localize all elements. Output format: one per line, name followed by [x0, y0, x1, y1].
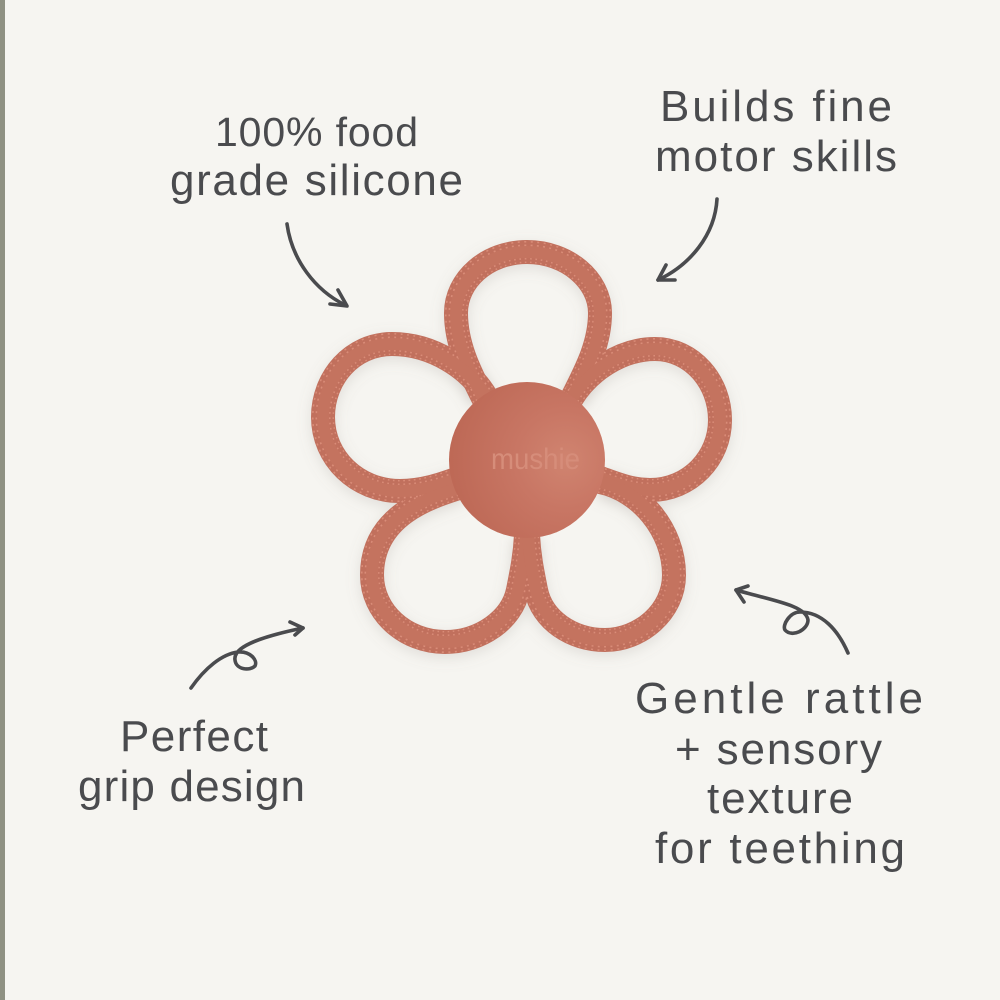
heading: 100% food grade silicone [170, 109, 463, 205]
heading: gentle rattle and sensory texture for teething: texture [707, 774, 853, 823]
arrow: to top petal [658, 199, 717, 280]
petal rings [323, 252, 720, 642]
heading: gentle rattle and sensory texture for teething [635, 674, 923, 873]
arrow: to upper left petal [287, 224, 347, 306]
heading: perfect grip design: grip design [78, 762, 305, 811]
arrow: looped, to lower right petal [736, 586, 848, 653]
heading: perfect grip design: Perfect [120, 712, 268, 761]
arrow: looped, to lower left petal [191, 622, 303, 688]
heading: 100% food grade silicone: grade silicone [170, 156, 463, 205]
heading: gentle rattle and sensory texture for teething: for teething [655, 824, 905, 873]
soft shadow [323, 256, 720, 646]
heading: perfect grip design [78, 712, 305, 811]
heading: 100% food grade silicone: 100% food [215, 109, 418, 155]
center ball with logo [449, 382, 605, 538]
heading: gentle rattle and sensory texture for teething: + sensory [675, 725, 882, 774]
heading: builds fine motor skills: motor skills [655, 132, 897, 181]
heading: builds fine motor skills [655, 82, 897, 181]
heading: gentle rattle and sensory texture for teething: Gentle rattle [635, 674, 923, 723]
left edge bar [0, 0, 5, 1000]
heading: builds fine motor skills: Builds fine [660, 82, 892, 131]
center ball with logo: mushie [491, 443, 580, 476]
flower teether [323, 252, 720, 646]
